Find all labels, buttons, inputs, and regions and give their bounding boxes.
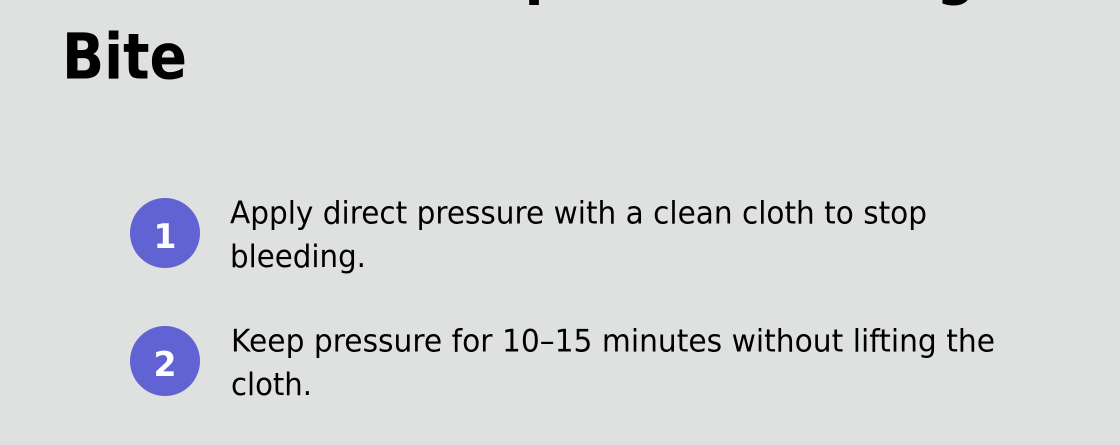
step 2 number badge: 2 xyxy=(154,345,176,385)
step 1 text: Apply direct pressure with a clean cloth to stop xyxy=(230,196,927,232)
step 2 xyxy=(130,324,995,403)
step 2 number badge xyxy=(130,326,200,396)
title: Bite xyxy=(62,20,187,94)
step 1 text: bleeding. xyxy=(230,239,366,275)
step 1 number badge xyxy=(130,198,200,268)
step 2 text xyxy=(231,324,995,403)
title xyxy=(62,0,976,94)
step 2 text: Keep pressure for 10–15 minutes without lifting the xyxy=(231,324,995,360)
step 1 xyxy=(130,196,927,275)
step 1 number badge: 1 xyxy=(154,217,176,257)
step 2 text: cloth. xyxy=(231,367,312,403)
step 1 text xyxy=(230,196,927,275)
